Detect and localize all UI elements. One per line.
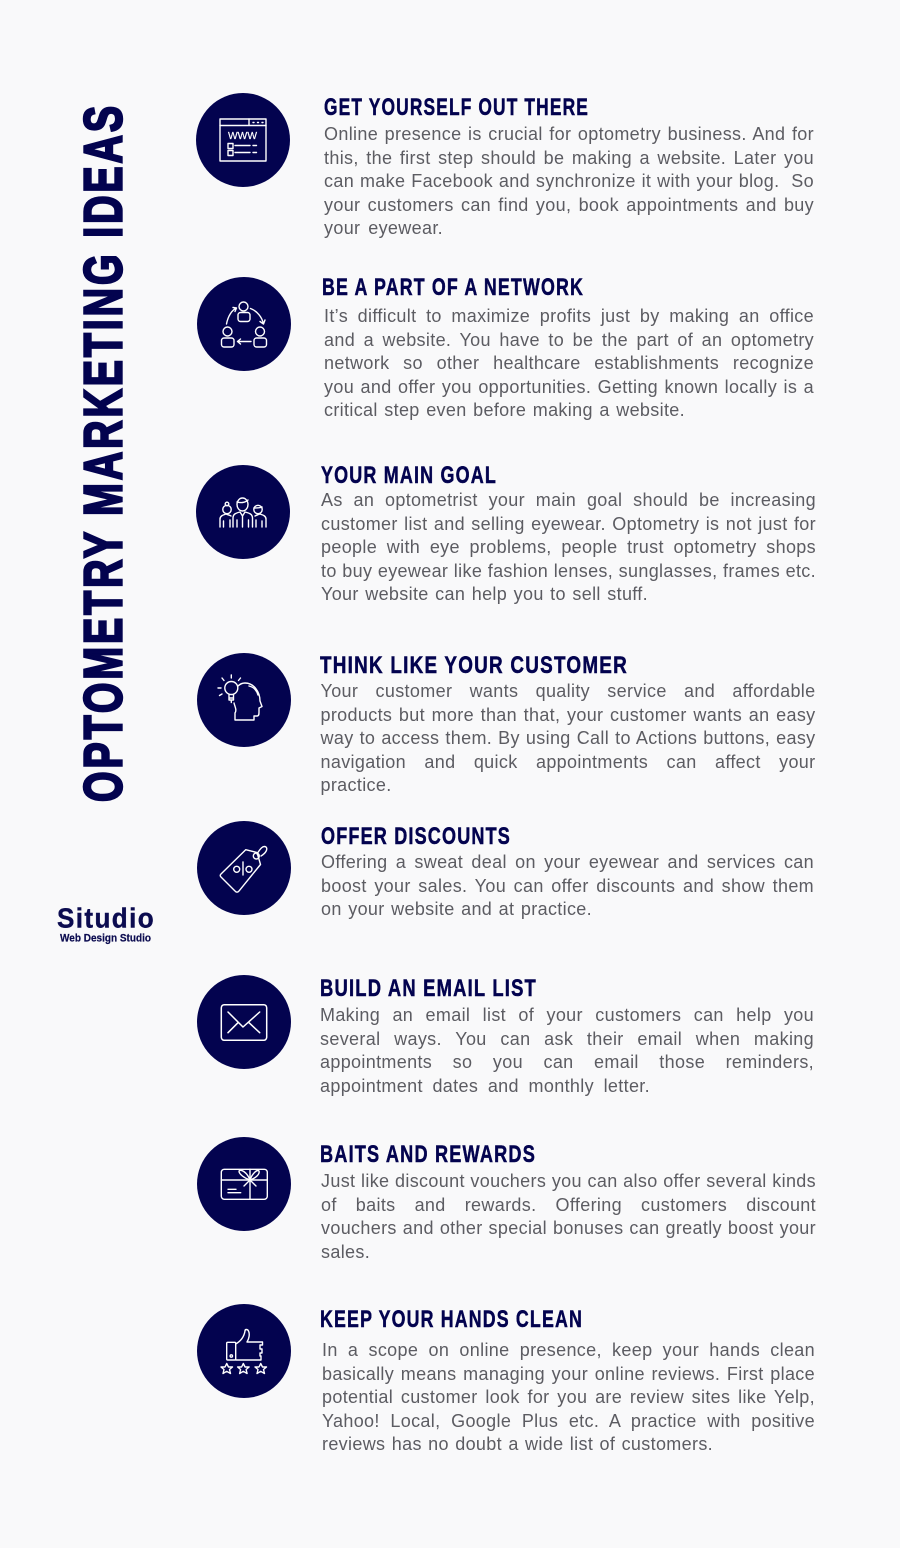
heading: KEEP YOUR HANDS CLEAN xyxy=(320,1306,583,1333)
heading: YOUR MAIN GOAL xyxy=(321,462,497,489)
item: baits and rewards xyxy=(320,1141,816,1262)
text block: In a scope on online presence, keep your hands clean xyxy=(322,1340,815,1360)
item: get yourself out there xyxy=(324,94,814,238)
heading: THINK LIKE YOUR CUSTOMER xyxy=(320,652,628,679)
item: offer discounts xyxy=(321,823,814,919)
text block xyxy=(321,852,814,919)
text block xyxy=(320,1005,814,1096)
text block: your eyewear. xyxy=(324,218,443,238)
item: think like your customer xyxy=(320,652,816,795)
icon: team xyxy=(196,465,290,559)
item: your main goal xyxy=(321,462,816,604)
text block: Making an email list of your customers can help you xyxy=(320,1005,814,1025)
icon: website xyxy=(196,93,290,187)
text block: this, the first step should be making a website. Later you xyxy=(324,148,814,168)
text block xyxy=(324,124,814,238)
text block: can make Facebook and synchronize it with your blog. So xyxy=(324,171,814,191)
icon: thinking head xyxy=(197,653,291,747)
text block: and a website. You have to be the part of an optometry xyxy=(324,330,814,350)
text block: Offering a sweat deal on your eyewear and services can xyxy=(321,852,814,872)
text block: way to access them. By using Call to Actions buttons, easy xyxy=(320,728,816,748)
heading: BUILD AN EMAIL LIST xyxy=(320,975,537,1002)
text block: It’s difficult to maximize profits just by making an office xyxy=(324,306,814,326)
text block xyxy=(320,681,816,795)
text block: navigation and quick appointments can affect your xyxy=(320,752,816,772)
text block xyxy=(322,1340,815,1454)
text block: boost your sales. You can offer discounts and show them xyxy=(321,876,814,896)
text block: vouchers and other special bonuses can greatly boost your xyxy=(321,1218,816,1238)
text block: practice. xyxy=(320,775,392,795)
text block: Your website can help you to sell stuff. xyxy=(321,584,648,604)
text block: potential customer look for you are review sites like Yelp, xyxy=(322,1387,815,1407)
text block: Your customer wants quality service and affordable xyxy=(320,681,816,701)
text block: basically means managing your online reviews. First place xyxy=(322,1364,815,1384)
text block: products but more than that, your customer wants an easy xyxy=(320,704,816,724)
text block: Yahoo! Local, Google Plus etc. A practice with positive xyxy=(322,1410,815,1430)
heading: OFFER DISCOUNTS xyxy=(321,823,511,850)
icon: network xyxy=(197,277,291,371)
heading: BAITS AND REWARDS xyxy=(320,1141,536,1168)
item: keep your hands clean xyxy=(320,1306,815,1454)
text block: critical step even before making a website. xyxy=(324,400,685,420)
text block: several ways. You can ask their email when making xyxy=(320,1028,814,1048)
heading: GET YOURSELF OUT THERE xyxy=(324,94,589,121)
logo: Situdio: Situdio xyxy=(57,903,155,934)
text block: on your website and at practice. xyxy=(321,899,592,919)
item: be a part of a network xyxy=(322,274,814,420)
item: build an email list xyxy=(320,975,814,1096)
icon: discount tag xyxy=(197,821,291,915)
icon: email envelope xyxy=(197,975,291,1069)
text block: appointments so you can email those reminders, xyxy=(320,1052,814,1072)
logo: Situdio: Web Design Studio xyxy=(60,933,151,945)
text block xyxy=(324,306,814,420)
icon: thumbs up with stars xyxy=(197,1304,291,1398)
text block: network so other healthcare establishments recognize xyxy=(324,353,814,373)
text block: people with eye problems, people trust optometry shops xyxy=(321,537,816,557)
text block: customer list and selling eyewear. Optometry is not just for xyxy=(321,514,816,534)
heading: BE A PART OF A NETWORK xyxy=(322,274,584,301)
text block: to buy eyewear like fashion lenses, sunglasses, frames etc. xyxy=(321,560,816,580)
text block xyxy=(321,490,816,604)
text block: sales. xyxy=(321,1242,370,1262)
text block: of baits and rewards. Offering customers discount xyxy=(321,1194,816,1214)
text block: Just like discount vouchers you can also offer several kinds xyxy=(321,1171,816,1191)
text block: Online presence is crucial for optometry business. And for xyxy=(324,124,814,144)
logo: Situdio xyxy=(57,903,155,945)
text block: you and offer you opportunities. Getting known locally is a xyxy=(324,376,814,396)
text block xyxy=(321,1171,816,1262)
text block: appointment dates and monthly letter. xyxy=(320,1076,650,1096)
text block: As an optometrist your main goal should be increasing xyxy=(321,490,816,510)
text block: reviews has no doubt a wide list of customers. xyxy=(322,1434,713,1454)
text block: your customers can find you, book appointments and buy xyxy=(324,194,814,214)
icon: gift card xyxy=(197,1137,291,1231)
icon: website: WWW xyxy=(228,131,257,142)
